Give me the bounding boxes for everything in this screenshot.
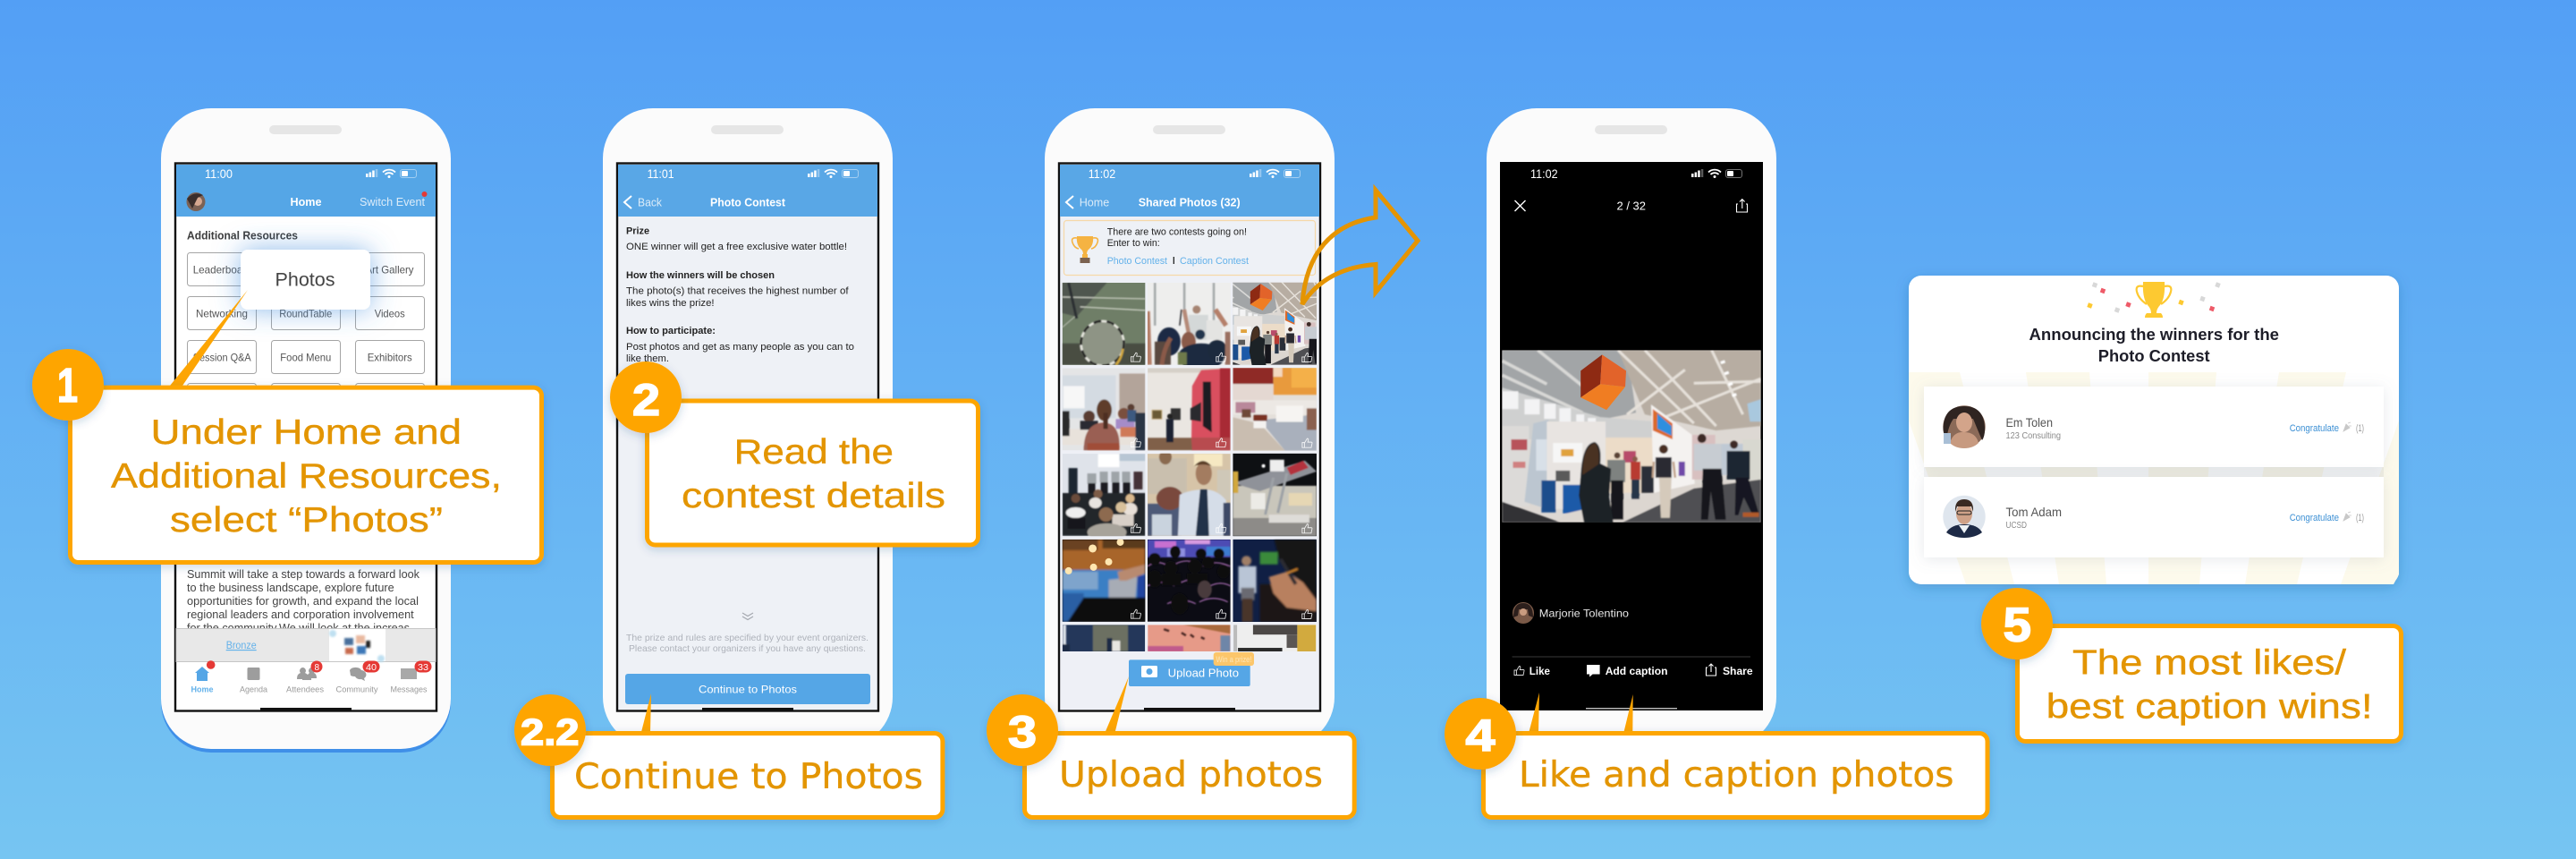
bottom divider xyxy=(1513,657,1750,658)
agenda tab icon xyxy=(247,668,259,680)
step 2.2 callout xyxy=(514,693,943,818)
how to participate text: Post photos and get as many people as you can to xyxy=(626,342,854,353)
photos popup highlight: Photos xyxy=(275,268,335,290)
callout text: Like and caption photos xyxy=(1519,755,1953,795)
resource button labels: Leaderboard xyxy=(193,263,252,276)
pointer to upload button xyxy=(1106,676,1129,732)
photo counter: 2 / 32 xyxy=(1617,200,1646,213)
share action xyxy=(1707,664,1753,677)
close icon xyxy=(1515,200,1526,211)
screen xyxy=(1059,163,1320,710)
phone face xyxy=(161,108,451,749)
callout box xyxy=(70,387,542,562)
tab bar labels: Home xyxy=(191,685,213,694)
sponsor bar: Bronze xyxy=(226,641,257,651)
back button xyxy=(624,196,663,209)
winner row: Em Tolen: Em Tolen xyxy=(2005,415,2053,430)
photo: exhibition stand xyxy=(1233,453,1317,537)
callout text: best caption wins! xyxy=(2046,687,2373,727)
home indicator xyxy=(1144,708,1235,710)
card title: Announcing the winners for the xyxy=(2029,326,2279,344)
resource button labels xyxy=(193,263,413,363)
winner row: Tom Adam: Tom Adam xyxy=(2005,505,2062,519)
continue button xyxy=(625,674,870,704)
number badge 4 xyxy=(1445,698,1516,770)
callout box xyxy=(648,401,979,545)
photos popup highlight xyxy=(241,250,370,310)
screen title: Shared Photos (32) xyxy=(1139,197,1241,209)
trophy icon xyxy=(2137,282,2171,318)
tab bar labels: Attendees xyxy=(286,685,324,694)
win a prize badge xyxy=(1214,652,1254,666)
step 1 callout xyxy=(32,290,542,562)
number badge 2 xyxy=(610,361,682,433)
photo: partial row middle xyxy=(1148,625,1231,651)
pointer to add caption xyxy=(1624,694,1633,732)
card title xyxy=(2029,326,2279,365)
winner row: Em Tolen xyxy=(1924,387,2384,467)
how to participate text: How to participate: xyxy=(626,326,716,336)
speaker xyxy=(711,125,784,134)
callout text xyxy=(111,413,502,540)
contest banner xyxy=(1064,220,1315,276)
photographer name: Marjorie Tolentino xyxy=(1539,607,1629,619)
winner row gap shadow xyxy=(1924,467,2384,477)
phone 3: shared photos xyxy=(1045,108,1337,747)
clock: 11:01 xyxy=(648,166,674,181)
phone 4: photo viewer xyxy=(1487,108,1776,747)
callout text: select “Photos” xyxy=(170,501,443,540)
resource button labels: Networking xyxy=(196,308,248,320)
switch event link: Switch Event xyxy=(360,196,426,208)
pointer to continue button xyxy=(641,693,651,732)
how winners are chosen text: The photo(s) that receives the highest number of xyxy=(626,286,850,297)
tab badges: 8 xyxy=(315,663,320,673)
sunburst stripes xyxy=(1909,372,2399,584)
number badge 2.2: 2.2 xyxy=(521,710,580,753)
win a prize badge: Win a prize! xyxy=(1216,655,1252,664)
curved arrow from photo to viewer xyxy=(1302,190,1418,304)
callout box xyxy=(2018,626,2401,741)
clock: 11:02 xyxy=(1089,166,1115,181)
event description text: regional leaders and corporation involvement xyxy=(187,608,414,621)
phone face xyxy=(1045,108,1335,747)
number badge 4: 4 xyxy=(1465,710,1496,761)
sponsor bar xyxy=(176,628,436,662)
upload photo button: Upload Photo xyxy=(1168,668,1239,680)
resource button labels: Session Q&A xyxy=(193,351,251,363)
prize text: ONE winner will get a free exclusive water bottle! xyxy=(626,242,847,252)
card panel xyxy=(1909,276,2399,584)
tab bar labels: Agenda xyxy=(240,685,268,694)
organizer disclaimer: Please contact your organizers if you have any questions. xyxy=(629,643,866,654)
screen xyxy=(1500,162,1763,710)
photo: bokeh and notes xyxy=(1063,539,1145,622)
speaker xyxy=(1595,125,1667,134)
event description text: for the community.We will look at the increas xyxy=(187,622,410,634)
photo: taking notes xyxy=(1233,539,1317,622)
status icons xyxy=(808,169,859,178)
photo: businessman xyxy=(1148,453,1231,537)
photo: seminar room xyxy=(1063,369,1145,451)
callout text: Read the xyxy=(734,433,894,472)
notification dot xyxy=(422,191,428,197)
resource button labels: Exhibitors xyxy=(368,351,412,363)
tab bar labels xyxy=(191,685,428,694)
photo: tennis racket xyxy=(1063,283,1145,365)
tab badges xyxy=(207,660,431,673)
avatar xyxy=(1943,405,1986,448)
number badge 5 xyxy=(1981,588,2053,659)
home indicator xyxy=(1586,708,1677,709)
like action: Like xyxy=(1530,665,1550,677)
header bar xyxy=(1060,165,1319,217)
screen xyxy=(617,163,878,710)
photo: art gallery xyxy=(1148,368,1231,451)
event description text xyxy=(187,568,420,634)
winner row: Em Tolen: (1) xyxy=(2356,423,2364,434)
confetti xyxy=(2087,282,2221,313)
contest banner: Caption Contest xyxy=(1180,256,1249,267)
number badge 3: 3 xyxy=(1008,707,1037,757)
how to participate text xyxy=(626,326,854,364)
clock: 11:02 xyxy=(1530,166,1558,181)
pointer to photos xyxy=(170,290,248,386)
step 2 callout xyxy=(610,361,979,545)
callout text xyxy=(2046,644,2373,727)
speaker xyxy=(1153,125,1225,134)
photo: raised hands xyxy=(1148,283,1231,365)
back button: Back xyxy=(638,197,663,209)
status icons xyxy=(366,169,417,178)
number badge 1 xyxy=(32,349,104,421)
phone 2: contest details xyxy=(603,108,893,747)
callout text: contest details xyxy=(682,477,945,515)
contest banner: Enter to win: xyxy=(1107,238,1160,249)
add caption action: Add caption xyxy=(1606,665,1667,677)
screen title: Photo Contest xyxy=(710,197,786,209)
callout box xyxy=(553,734,943,818)
share icon xyxy=(1737,200,1748,212)
section heading: Additional Resources xyxy=(187,229,298,242)
tab bar labels: Messages xyxy=(390,685,428,694)
winner row: Tom Adam: Congratulate xyxy=(2290,513,2339,523)
home indicator xyxy=(260,708,352,710)
clock: 11:00 xyxy=(205,166,233,181)
community tab icon xyxy=(350,668,366,681)
callout box xyxy=(1483,734,1987,818)
how winners are chosen text: likes wins the prize! xyxy=(626,298,715,309)
avatar xyxy=(1943,496,1986,538)
organizer disclaimer: The prize and rules are specified by your event organizers. xyxy=(626,633,869,643)
nav title: Home xyxy=(290,196,322,208)
pointer to like xyxy=(1529,693,1539,732)
callout text: Under Home and xyxy=(150,413,462,452)
callout text: Additional Resources, xyxy=(111,457,502,496)
winner row: Em Tolen: 123 Consulting xyxy=(2005,431,2061,441)
trophy icon xyxy=(1072,236,1097,263)
resource button labels: RoundTable xyxy=(279,308,333,320)
number badge 2: 2 xyxy=(632,375,660,425)
back to home xyxy=(1066,196,1109,209)
photo: partial row left xyxy=(1063,625,1145,651)
prize text xyxy=(626,225,847,252)
screen xyxy=(175,163,436,710)
scroll chevrons xyxy=(742,613,753,619)
resource button labels: Food Menu xyxy=(280,351,331,363)
upload photo button xyxy=(1129,659,1250,686)
event description text: Summit will take a step towards a forward look xyxy=(187,568,420,581)
step 4 callout xyxy=(1445,693,1987,818)
resource buttons xyxy=(188,252,424,417)
contest banner: There are two contests going on! xyxy=(1107,227,1247,238)
photo: panel on stage xyxy=(1063,454,1145,537)
photo: expo hall booth xyxy=(1233,283,1317,365)
attendees tab icon xyxy=(297,668,317,680)
photo: audience with lights xyxy=(1148,539,1231,622)
phone body xyxy=(161,113,451,753)
event description text: to the business landscape, explore future xyxy=(187,582,394,594)
organizer disclaimer xyxy=(626,633,869,654)
header bar xyxy=(176,165,436,217)
resource button labels: Art Gallery xyxy=(365,263,413,276)
how to participate text: like them. xyxy=(626,353,669,364)
winner row: Em Tolen: Congratulate xyxy=(2290,423,2339,434)
tab bar labels: Community xyxy=(336,685,378,694)
phone face xyxy=(1487,108,1776,747)
share action: Share xyxy=(1723,665,1753,677)
callout text: The most likes/ xyxy=(2072,644,2346,682)
header bar xyxy=(618,165,877,217)
event description text: opportunities for growth, and expand the local xyxy=(187,595,419,608)
camera icon xyxy=(1141,666,1157,677)
messages tab icon xyxy=(401,668,417,679)
contest banner: Photo Contest xyxy=(1107,256,1167,267)
number badge 5: 5 xyxy=(2004,598,2031,651)
resource button labels: Videos xyxy=(375,308,405,320)
tab badges: 40 xyxy=(366,663,377,673)
phone face xyxy=(603,108,893,747)
number badge 3 xyxy=(987,694,1058,766)
card title: Photo Contest xyxy=(2098,347,2210,365)
status icons xyxy=(1250,169,1301,178)
number badge 2.2 xyxy=(514,694,586,766)
callout text: Continue to Photos xyxy=(574,757,923,797)
photo: partial row right xyxy=(1233,625,1317,651)
continue button: Continue to Photos xyxy=(699,684,797,696)
callout box xyxy=(1025,734,1354,818)
callout text: Upload photos xyxy=(1059,755,1323,795)
large expo photo xyxy=(1502,350,1761,523)
how winners are chosen text: How the winners will be chosen xyxy=(626,270,775,281)
step 5 callout xyxy=(1981,588,2401,741)
phone 1: home screen xyxy=(161,108,451,753)
tab bar icons xyxy=(195,667,417,681)
step 3 callout xyxy=(987,676,1354,818)
photographer avatar xyxy=(1513,602,1534,624)
prize text: Prize xyxy=(626,225,649,236)
speaker xyxy=(269,125,342,134)
profile avatar xyxy=(186,192,206,211)
winner row: Tom Adam: UCSD xyxy=(2005,521,2027,531)
callout text xyxy=(682,433,945,515)
winner row: Tom Adam xyxy=(1924,477,2384,557)
winner row: Tom Adam: (1) xyxy=(2356,513,2364,523)
tab badges: 33 xyxy=(418,663,428,673)
how winners are chosen text xyxy=(626,270,850,309)
home tab icon xyxy=(195,667,209,681)
photo: trade show lounge xyxy=(1233,368,1317,451)
back to home: Home xyxy=(1080,197,1109,209)
number badge 1: 1 xyxy=(57,359,78,412)
status icons xyxy=(1691,169,1742,178)
home indicator xyxy=(702,708,793,710)
winners card xyxy=(1909,276,2399,584)
like action xyxy=(1514,665,1550,677)
